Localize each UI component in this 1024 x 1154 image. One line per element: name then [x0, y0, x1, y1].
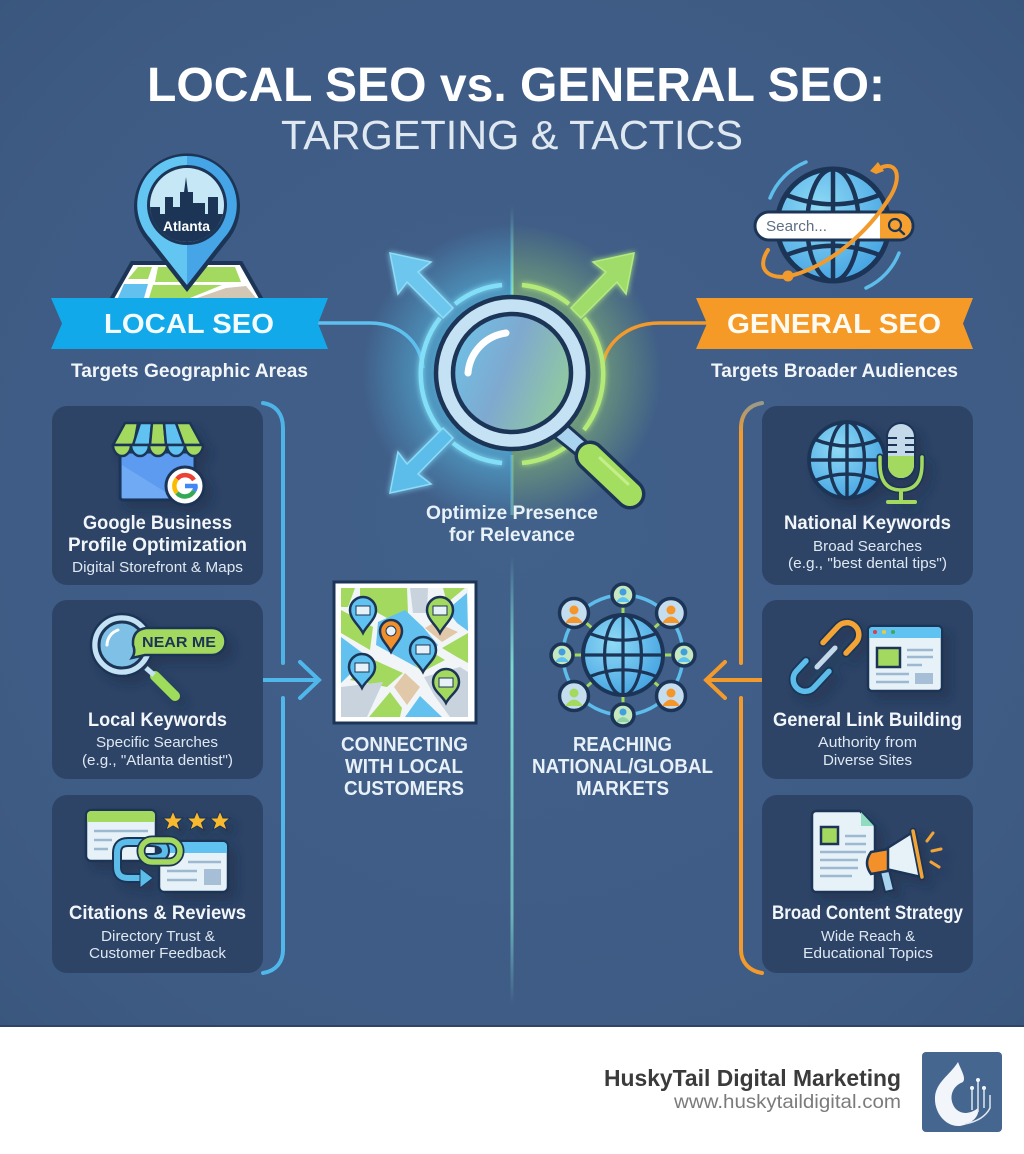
caption: global markets [532, 734, 713, 800]
icon: globe and microphone [809, 422, 922, 504]
arrow: local tactics to local customers [263, 662, 319, 698]
title [147, 59, 885, 158]
globe [583, 615, 663, 695]
footer band [0, 1025, 1024, 1154]
card text: Local Keywords [88, 709, 227, 731]
banner: local SEO [51, 298, 328, 349]
subheading: general: Targets Broader Audiences [711, 360, 958, 382]
card text [82, 709, 233, 769]
footer brand text [604, 1065, 901, 1113]
card text [772, 902, 963, 962]
banner: general SEO [696, 298, 973, 349]
icon: location pin [134, 153, 240, 292]
subheading: local: Targets Geographic Areas [71, 360, 308, 382]
banner: local SEO: LOCAL SEO [104, 308, 274, 339]
card text: Educational Topics [803, 945, 933, 962]
arrow: bottom left [390, 428, 453, 493]
left bracket connector [263, 403, 319, 973]
card text: Specific Searches [96, 734, 218, 751]
caption: local customers: CUSTOMERS [344, 778, 464, 800]
card text: Profile Optimization [68, 534, 247, 556]
arrow: top left [390, 253, 453, 318]
card text [69, 902, 246, 962]
banner: general SEO: GENERAL SEO [727, 308, 941, 339]
card text: Digital Storefront & Maps [72, 559, 243, 576]
right bracket connector [706, 403, 762, 973]
title: TARGETING & TACTICS [281, 112, 743, 158]
ring arcs: blue [421, 285, 502, 463]
icon: magnifier with near me bubble: NEAR ME [142, 634, 216, 651]
magnifier handle [553, 424, 630, 494]
pins on the map [349, 597, 459, 703]
center caption: for Relevance [449, 524, 575, 546]
general SEO header [696, 162, 973, 382]
footer brand text: www.huskytaildigital.com [673, 1091, 901, 1113]
people nodes [551, 584, 695, 726]
card text: Citations & Reviews [69, 902, 246, 924]
icon: chain link and web page [788, 618, 942, 696]
caption: local customers: WITH LOCAL [345, 756, 463, 778]
connector: general ribbon to magnifier [602, 323, 707, 368]
local SEO header [51, 153, 328, 382]
card text: Customer Feedback [89, 945, 227, 962]
icon: magnifier with near me bubble [91, 614, 226, 696]
center caption [426, 502, 598, 546]
card text: Wide Reach & [821, 928, 915, 945]
card text: General Link Building [773, 709, 962, 731]
center caption: Optimize Presence [426, 502, 598, 524]
global network illustration [551, 584, 695, 726]
card text: Broad Content Strategy [772, 902, 963, 924]
panel: National Keywords [762, 406, 973, 585]
card text: Broad Searches [813, 538, 922, 555]
card text: (e.g., "best dental tips") [788, 555, 947, 572]
caption: global markets: MARKETS [576, 778, 669, 800]
card text [68, 512, 247, 576]
caption: local customers: CONNECTING [341, 734, 468, 756]
panel: General Link Building [762, 600, 973, 779]
center graphic: magnifier with arrows [390, 253, 634, 494]
card text: Diverse Sites [823, 752, 912, 769]
panel: Local Keywords [52, 600, 263, 779]
local customers map illustration [334, 582, 476, 723]
card text [773, 709, 962, 769]
card text: (e.g., "Atlanta dentist") [82, 752, 233, 769]
center vertical divider [510, 205, 514, 1005]
caption: local customers [341, 734, 468, 800]
icon: map [111, 263, 262, 300]
panel: Citations & Reviews [52, 795, 263, 973]
arrow: top right [571, 253, 634, 318]
icon: globe with search bar [755, 162, 913, 288]
caption: global markets: REACHING [573, 734, 672, 756]
icon: directory windows, link and stars [86, 810, 230, 892]
card text: National Keywords [784, 512, 951, 534]
icon: storefront with Google badge [113, 423, 204, 505]
card text: Directory Trust & [101, 928, 215, 945]
caption: global markets: NATIONAL/GLOBAL [532, 756, 713, 778]
title: LOCAL SEO vs. GENERAL SEO: [147, 59, 885, 112]
magnifier lens [436, 297, 588, 449]
connector: local ribbon to magnifier [318, 323, 423, 368]
ring arcs: green [522, 285, 603, 463]
card text [784, 512, 951, 572]
logo [922, 1052, 1002, 1132]
card text: Authority from [818, 734, 917, 751]
icon: globe with search bar: Search... [766, 219, 827, 235]
panel: Broad Content Strategy [762, 795, 973, 973]
icon: document and megaphone [812, 811, 941, 892]
card text: Google Business [83, 512, 232, 534]
panel: Google Business Profile [52, 406, 263, 585]
footer brand text: HuskyTail Digital Marketing [604, 1065, 901, 1091]
icon: location pin: Atlanta [163, 219, 210, 234]
center glow [372, 233, 652, 513]
arrow: general tactics to global markets [706, 662, 761, 698]
